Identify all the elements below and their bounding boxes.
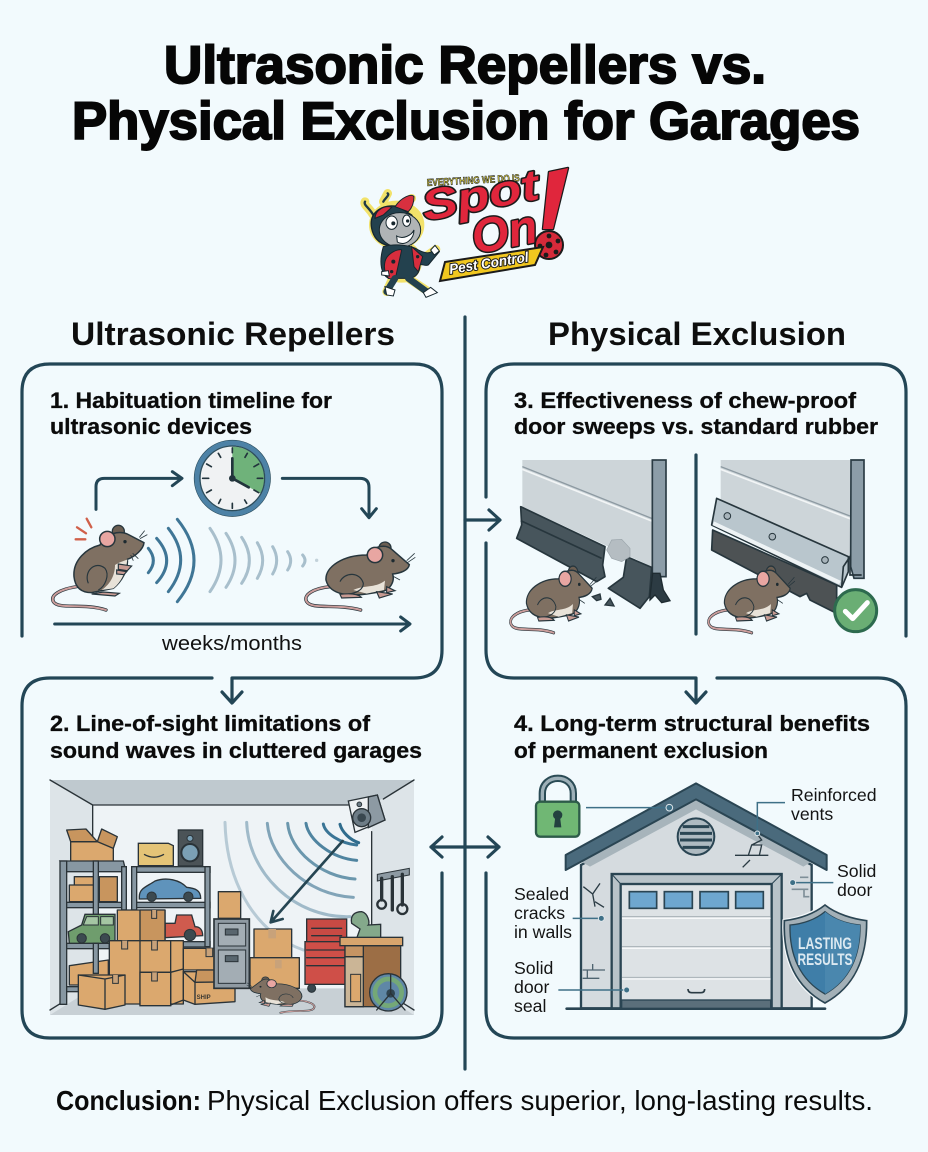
label: sealed cracks: in walls — [514, 922, 572, 942]
banner: Pest Control: Pest Control — [448, 248, 531, 277]
illustration: chewed rubber sweep — [517, 460, 670, 608]
"everything we do is" tagline: EVERYTHING WE DO IS — [427, 173, 520, 189]
label: solid door: door — [837, 880, 873, 900]
heading: Ultrasonic Repellers: Ultrasonic Repellers — [71, 316, 395, 352]
title — [72, 36, 860, 151]
label: sealed cracks — [514, 884, 572, 942]
second shelf with cars — [132, 830, 210, 947]
icon: fading sound waves — [210, 528, 305, 592]
shield text: RESULTS — [798, 950, 852, 969]
label: solid door — [837, 861, 876, 900]
wordmark: Spot On!: Spot — [418, 161, 545, 231]
garage door — [612, 874, 782, 1008]
icon: ultrasonic speaker — [348, 795, 385, 832]
heading 4: of permanent exclusion — [514, 738, 768, 763]
red tool chest — [305, 919, 347, 992]
panel 1: habituation timeline — [22, 364, 442, 703]
shield text — [798, 934, 852, 969]
filing cabinet — [214, 892, 249, 988]
heading 4 — [514, 711, 870, 763]
illustration: cluttered garage — [50, 780, 414, 1015]
heading 2: 2. Line-of-sight limitations of — [50, 711, 371, 736]
workbench, vise and hose reel — [340, 912, 407, 1011]
icon: calm mouse — [306, 542, 415, 610]
title: Ultrasonic Repellers vs. — [164, 36, 766, 95]
label: reinforced vents: vents — [791, 804, 833, 824]
garage building — [566, 783, 827, 1009]
comparison divider — [694, 455, 698, 634]
title: Physical Exclusion for Garages — [72, 92, 860, 151]
label: solid door seal: Solid — [514, 958, 553, 978]
icon: ladybug mascot — [365, 193, 439, 297]
logo: Spot On! Pest Control — [365, 161, 568, 297]
arrow: blocked sound path — [271, 841, 343, 922]
heading 4: 4. Long-term structural benefits — [514, 711, 870, 736]
arrows: before and after clock — [55, 472, 410, 631]
heading 1: ultrasonic devices — [50, 414, 252, 439]
panel 3: door sweeps — [486, 364, 906, 703]
banner: Pest Control — [440, 247, 543, 281]
panel 4: structural benefits — [486, 678, 906, 1038]
stacked cardboard boxes — [78, 910, 242, 1009]
label: solid door: Solid — [837, 861, 876, 881]
garage room — [50, 780, 414, 1015]
stacked cardboard boxes: SHIP — [197, 995, 211, 1001]
icon: lasting results shield — [783, 903, 868, 1004]
wordmark: Spot On! — [418, 161, 568, 265]
label: sealed cracks: Sealed — [514, 884, 569, 904]
icon: startled mouse — [53, 525, 147, 610]
label: solid door seal: door — [514, 977, 550, 997]
callout leader lines — [558, 803, 833, 993]
label: solid door seal: seal — [514, 996, 546, 1016]
icon: padlock — [536, 778, 579, 837]
icon: ladybug ball — [535, 231, 563, 259]
illustration: habituation sequence — [53, 441, 415, 631]
blocking boxes — [250, 929, 299, 988]
heading 3: 3. Effectiveness of chew-proof — [514, 388, 857, 413]
icon: mouse behind boxes — [247, 977, 314, 1013]
panel 2: line of sight — [22, 678, 442, 1038]
heading: Physical Exclusion: Physical Exclusion — [548, 316, 846, 352]
hanging tools — [377, 868, 409, 914]
arrow: exclusion direction — [465, 510, 500, 530]
label: reinforced vents: Reinforced — [791, 785, 877, 805]
icon: green check — [835, 590, 877, 632]
wordmark: Spot On!: On — [467, 200, 542, 265]
fading wave dot — [315, 559, 318, 562]
tall shelf with boxes and toy truck — [60, 829, 126, 1004]
icon: startled marks — [76, 519, 91, 539]
roof vent — [678, 818, 714, 855]
label: reinforced vents — [791, 785, 877, 824]
heading 3: door sweeps vs. standard rubber — [514, 414, 878, 439]
icon: mouse at metal sweep — [709, 566, 795, 633]
shield text: LASTING — [798, 934, 852, 953]
illustration: chew-proof metal sweep — [712, 460, 864, 613]
icon: clock — [195, 441, 270, 516]
icon: strong sound waves — [148, 519, 194, 602]
heading 2 — [50, 711, 422, 763]
sound waves — [225, 822, 357, 950]
center divider — [463, 317, 467, 1069]
heading 1: 1. Habituation timeline for — [50, 388, 332, 413]
conclusion: Conclusion: — [56, 1085, 201, 1116]
heading 1 — [50, 388, 332, 439]
label: solid door seal — [514, 958, 553, 1016]
icon: mouse at chewed sweep — [511, 566, 597, 633]
conclusion: Physical Exclusion offers superior, long-lasting results. — [207, 1085, 873, 1116]
label: weeks/months: weeks/months — [161, 633, 302, 655]
illustration: sealed garage — [536, 778, 868, 1009]
heading 3 — [514, 388, 878, 439]
arrow: two-way comparison — [431, 837, 499, 857]
label: sealed cracks: cracks — [514, 903, 565, 923]
heading 2: sound waves in cluttered garages — [50, 738, 422, 763]
